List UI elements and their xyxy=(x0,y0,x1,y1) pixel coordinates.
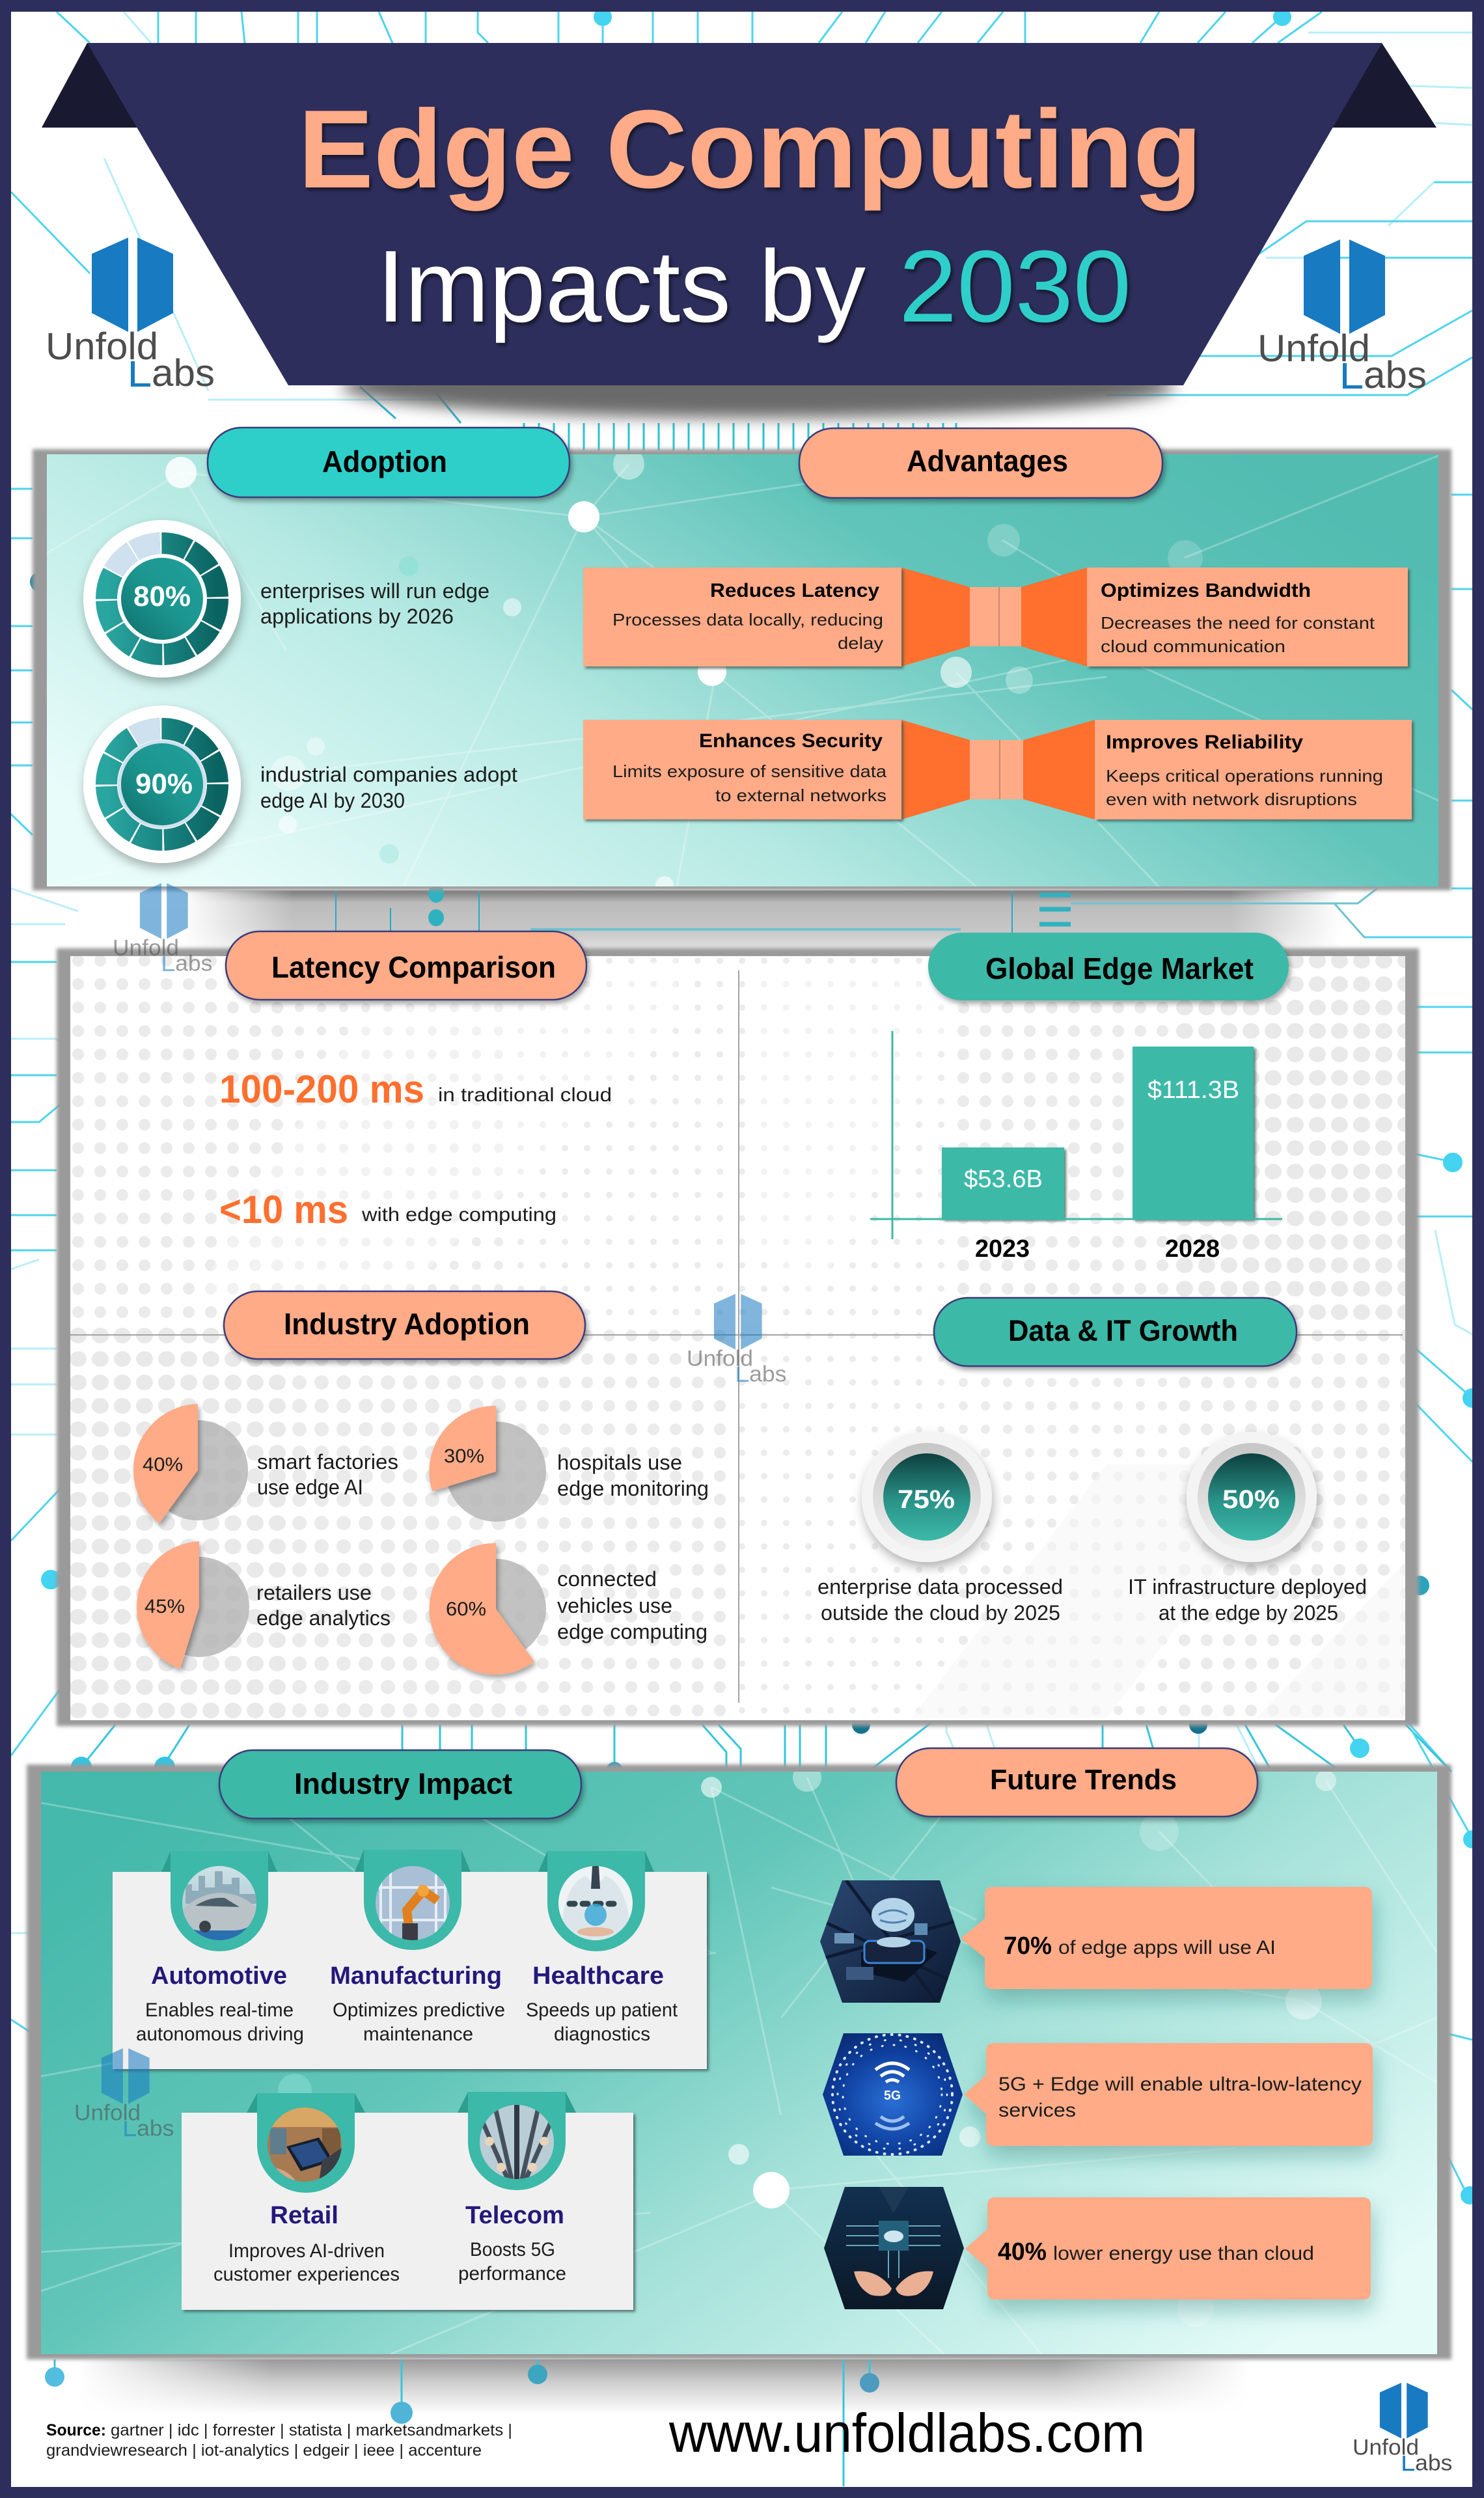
pie chart: smart factories 40% xyxy=(133,1404,398,1523)
watermark logo: centre xyxy=(687,1294,786,1387)
advantage pair: latency and bandwidth: Decreases the need for constant xyxy=(1101,613,1375,633)
sector: telecom: Boosts 5G xyxy=(470,2239,555,2260)
sector: healthcare: Healthcare xyxy=(532,1962,664,1990)
card: retail, telecom xyxy=(182,2092,633,2310)
watermark logo: industry impact panel: Unfold xyxy=(74,2100,141,2125)
heading: adoption xyxy=(208,428,570,497)
watermark logo: industry impact panel xyxy=(74,2048,174,2141)
donut: 90% xyxy=(83,706,241,863)
logo bottom right xyxy=(1353,2383,1452,2476)
logo bottom right: abs xyxy=(1415,2451,1452,2476)
donut: 80%: 80% xyxy=(133,581,191,612)
advantage pair: latency and bandwidth: Processes data locally, reducing xyxy=(612,610,883,629)
sector: retail: Retail xyxy=(270,2202,338,2229)
pie chart: connected vehicles 60%: 60% xyxy=(446,1599,486,1620)
sector: retail xyxy=(213,2093,400,2285)
stat: 75% data outside cloud: 75% xyxy=(898,1485,955,1514)
heading: future trends: Future Trends xyxy=(990,1764,1177,1796)
heading: industry impact xyxy=(219,1750,581,1819)
stat: 50% IT infrastructure: IT infrastructure deployed xyxy=(1128,1575,1367,1599)
heading: future trends xyxy=(896,1748,1257,1817)
advantage pair: security and reliability: Keeps critical operations running xyxy=(1106,766,1383,786)
callout: 70%: 70% xyxy=(1004,1932,1052,1960)
bar chart xyxy=(870,1031,1282,1263)
pie chart: connected vehicles 60%: edge computing xyxy=(557,1620,708,1643)
logo left: Unfold xyxy=(46,325,158,368)
source note: grandviewresearch | iot-analytics | edgeir | ieee | accenture xyxy=(46,2441,482,2460)
bar chart: 2023 xyxy=(975,1235,1030,1263)
text: 90% description: edge AI by 2030 xyxy=(260,789,405,812)
heading: adoption: Adoption xyxy=(322,445,447,478)
logo bottom right: Unfold xyxy=(1353,2435,1419,2460)
source note: Source: xyxy=(46,2421,106,2439)
bar chart: $53.6B xyxy=(964,1166,1043,1193)
banner shadow xyxy=(342,355,1175,418)
pie chart: retailers 45%: retailers use xyxy=(256,1581,372,1604)
banner wing left xyxy=(42,43,142,128)
comb lines above the panels xyxy=(524,423,956,450)
trend 1: AI xyxy=(820,1880,1372,2003)
title: Edge Computing xyxy=(298,87,1202,212)
title: Impacts by xyxy=(377,230,866,344)
pie chart: hospitals 30% xyxy=(429,1406,709,1522)
source note: gartner | idc | forrester | statista | marketsandmarkets | xyxy=(111,2421,512,2439)
logo left: abs xyxy=(152,352,215,394)
bar chart: 2028 xyxy=(1165,1235,1220,1263)
sector: healthcare xyxy=(526,1851,678,2045)
trend 2: 5G xyxy=(823,2033,1373,2156)
stat: 75% data outside cloud: enterprise data processed xyxy=(818,1575,1063,1599)
heading: latency comparison: Latency Comparison xyxy=(271,950,556,984)
pie chart: retailers 45%: edge analytics xyxy=(256,1606,391,1630)
advantage pair: latency and bandwidth xyxy=(583,568,1408,666)
latency figures: with edge computing xyxy=(361,1204,556,1226)
callout: 40%: 40% xyxy=(998,2238,1047,2266)
heading: industry adoption: Industry Adoption xyxy=(284,1307,530,1341)
sector: automotive xyxy=(136,1851,304,2045)
sector: automotive: autonomous driving xyxy=(136,2024,304,2045)
heading: advantages: Advantages xyxy=(907,444,1068,478)
image: brain hexagon xyxy=(820,1880,961,2003)
watermark logo: below adoption panel: abs xyxy=(175,952,212,976)
latency figures: in traditional cloud xyxy=(438,1084,612,1106)
heading: industry adoption xyxy=(224,1291,585,1359)
sector: telecom: performance xyxy=(458,2263,566,2285)
sector: healthcare: Speeds up patient xyxy=(526,1999,678,2021)
pie chart: retailers 45% xyxy=(137,1541,391,1669)
stat: 50% IT infrastructure: 50% xyxy=(1222,1485,1280,1514)
sector: healthcare: diagnostics xyxy=(554,2024,650,2045)
advantage pair: security and reliability: even with network disruptions xyxy=(1106,789,1357,809)
sector: automotive: Enables real-time xyxy=(145,1999,294,2021)
advantage pair: security and reliability: to external networks xyxy=(715,786,886,805)
panel: adoption and advantages xyxy=(33,448,1451,894)
banner wing right xyxy=(1332,43,1436,128)
image: 5G globe hexagon: 5G xyxy=(884,2089,901,2103)
callout: 40% xyxy=(965,2197,1371,2299)
text: 90% description: industrial companies adopt xyxy=(260,763,517,786)
pie chart: smart factories 40%: use edge AI xyxy=(257,1475,363,1499)
text: 80% description: enterprises will run edge xyxy=(260,579,489,603)
stat: 50% IT infrastructure xyxy=(1128,1432,1367,1625)
callout: 5G plus edge xyxy=(964,2043,1373,2146)
text: 90% description xyxy=(260,763,517,812)
sector: telecom: Telecom xyxy=(465,2202,564,2229)
donut: 80% xyxy=(83,520,241,678)
stat: 50% IT infrastructure: at the edge by 2025 xyxy=(1159,1601,1338,1625)
image: cloud chip hands hexagon xyxy=(824,2187,965,2309)
heading: global edge market xyxy=(928,933,1289,1000)
donut: 90%: 90% xyxy=(135,768,193,800)
stat: 75% data outside cloud xyxy=(818,1432,1063,1625)
callout: 5G plus edge: services xyxy=(998,2100,1076,2121)
title: 2030 xyxy=(899,230,1131,344)
heading: advantages xyxy=(799,428,1162,498)
advantage pair: latency and bandwidth: Reduces Latency xyxy=(710,580,879,601)
text: 80% description: applications by 2026 xyxy=(260,605,454,628)
card: automotive, manufacturing, healthcare xyxy=(113,1850,707,2069)
heading: data and IT growth: Data & IT Growth xyxy=(1008,1314,1238,1347)
text: 80% description xyxy=(260,579,489,628)
pie chart: connected vehicles 60%: connected xyxy=(557,1567,657,1591)
sector: automotive: Automotive xyxy=(151,1962,287,1990)
watermark logo: below adoption panel xyxy=(113,883,212,976)
callout: 70% xyxy=(961,1887,1372,1989)
sector: manufacturing: Optimizes predictive xyxy=(333,1999,505,2021)
logo right: Unfold xyxy=(1257,327,1370,370)
sector: manufacturing: Manufacturing xyxy=(330,1962,502,1990)
heading: latency comparison xyxy=(226,931,586,1000)
sector: manufacturing xyxy=(330,1850,505,2045)
source note xyxy=(46,2421,512,2460)
pie chart: retailers 45%: 45% xyxy=(144,1596,185,1617)
pie chart: hospitals 30%: hospitals use xyxy=(557,1451,682,1474)
pie chart: connected vehicles 60% xyxy=(430,1543,708,1675)
watermark logo: centre: abs xyxy=(749,1362,786,1387)
latency figures: <10 ms xyxy=(219,1188,348,1231)
stat: 75% data outside cloud: outside the cloud by 2025 xyxy=(821,1601,1060,1625)
advantage pair: security and reliability: Limits exposure of sensitive data xyxy=(612,762,887,781)
title xyxy=(298,87,1202,344)
trend 3: energy xyxy=(824,2187,1371,2309)
latency figures xyxy=(219,1067,612,1231)
pie chart: smart factories 40%: 40% xyxy=(143,1454,183,1475)
sector: retail: customer experiences xyxy=(213,2264,400,2285)
pie chart: connected vehicles 60%: vehicles use xyxy=(557,1594,672,1617)
sector: manufacturing: maintenance xyxy=(363,2024,473,2045)
panel: latency, market, industry and data xyxy=(57,948,1419,1726)
advantage pair: latency and bandwidth: delay xyxy=(838,633,883,653)
bar chart: $111.3B xyxy=(1147,1077,1239,1104)
watermark logo: industry impact panel: abs xyxy=(137,2117,174,2141)
image: 5G globe hexagon xyxy=(823,2033,963,2156)
soft shadows behind sections xyxy=(78,890,1341,2415)
pie chart: hospitals 30%: edge monitoring xyxy=(557,1477,709,1500)
heading: data and IT growth xyxy=(934,1298,1297,1366)
advantage pair: latency and bandwidth: Optimizes Bandwidth xyxy=(1101,580,1311,601)
logo right: abs xyxy=(1364,354,1427,396)
callout: 70%: of edge apps will use AI xyxy=(1058,1937,1276,1958)
pie chart: smart factories 40%: smart factories xyxy=(257,1450,398,1474)
watermark logo: centre: Unfold xyxy=(687,1346,753,1371)
callout: 5G plus edge: 5G + Edge will enable ultra-low-latency xyxy=(998,2074,1362,2095)
logo right xyxy=(1257,240,1427,396)
sector: retail: Improves AI-driven xyxy=(228,2240,385,2262)
advantage pair: latency and bandwidth: cloud communication xyxy=(1101,637,1285,656)
latency figures: 100-200 ms xyxy=(219,1067,424,1111)
advantage pair: security and reliability: Improves Reliability xyxy=(1106,732,1303,753)
pie chart: hospitals 30%: 30% xyxy=(444,1446,484,1467)
heading: industry impact: Industry Impact xyxy=(294,1767,512,1800)
advantage pair: security and reliability xyxy=(583,720,1412,819)
sector: telecom xyxy=(458,2092,576,2285)
callout: 40%: lower energy use than cloud xyxy=(1053,2243,1314,2264)
watermark logo: below adoption panel: Unfold xyxy=(113,935,179,960)
logo left xyxy=(46,238,215,394)
advantage pair: security and reliability: Enhances Security xyxy=(699,730,883,752)
title banner xyxy=(87,43,1382,385)
panel: industry impact and future trends xyxy=(27,1763,1451,2359)
website url: www.unfoldlabs.com xyxy=(668,2402,1145,2464)
heading: global edge market: Global Edge Market xyxy=(985,952,1254,985)
